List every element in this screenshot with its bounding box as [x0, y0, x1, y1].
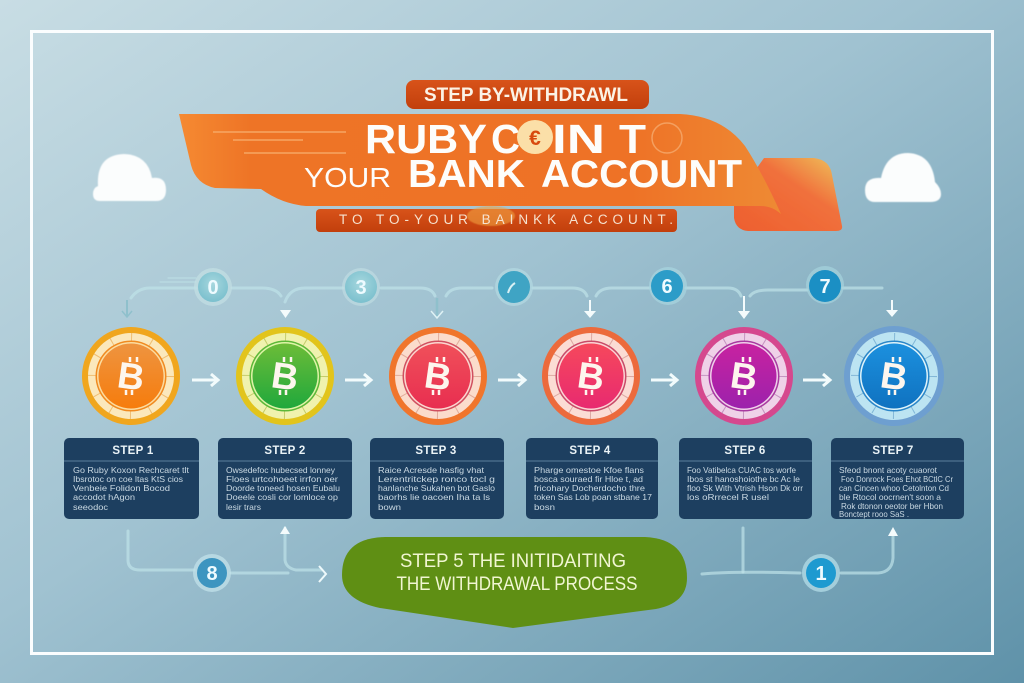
title line one: C	[491, 116, 520, 162]
arrows between coins	[192, 374, 830, 386]
panel: step 2: STEP 2	[264, 445, 306, 457]
top connector lines	[131, 278, 882, 302]
panel: step 4: bosca souraed fir Hloe t, ad	[534, 474, 643, 484]
icon: right cloud	[865, 153, 941, 202]
title line one	[365, 116, 646, 162]
coin 3 red	[389, 327, 487, 425]
panel: step 3: hanlanche Sukahen bot Gaslo	[378, 483, 495, 493]
panel: step 1: Ibsrotoc on coe ltas KtS cios	[73, 474, 183, 484]
number badge 1: 1	[815, 563, 827, 585]
panel: step 1	[64, 438, 199, 519]
subtitle pill: TO TO-YOUR BAINKK ACCOUNT.	[339, 212, 673, 227]
coin 5 purple	[695, 327, 793, 425]
panel: step 3: Raice Acresde hasfig vhat	[378, 465, 485, 475]
panel: step 1: Venbeie Folidon Bocod	[73, 483, 170, 493]
panel: step 6: STEP 6	[724, 445, 766, 457]
panel: step 2: Doeele cosli cor lomloce op	[226, 492, 338, 502]
bottom right connector	[702, 527, 898, 574]
number badge 8	[193, 554, 231, 592]
coin 3 red: B	[422, 354, 454, 399]
title line two: ACCOUNT	[541, 153, 742, 196]
number badge blank	[495, 268, 533, 306]
panel: step 7: STEP 7	[872, 445, 914, 457]
panel: step 4	[526, 438, 658, 519]
number badge 3: 3	[355, 277, 367, 299]
panel: step 1: STEP 1	[112, 445, 154, 457]
panel: step 5 callout: STEP 5 THE INITIDAITING	[400, 551, 626, 572]
panel: step 4: fricohary Docherdocho thre	[534, 483, 645, 493]
icon: coin letter: €	[529, 127, 541, 150]
number badge 3	[342, 268, 380, 306]
panel: step 2: Doorde toneed hosen Eubalu	[226, 483, 340, 493]
panel: step 4: token Sas Lob poan stbane 17	[534, 492, 652, 502]
number badge 7: 7	[819, 276, 831, 298]
coin 4 pink red	[542, 327, 640, 425]
coin 6 blue: B	[878, 354, 910, 399]
icon: coin letter	[517, 120, 553, 154]
ribbon front	[179, 114, 781, 214]
coin 5 purple: B	[728, 354, 760, 399]
panel: step 3	[370, 438, 504, 519]
title line one: IN	[552, 116, 605, 162]
title line two	[304, 153, 742, 196]
panel: step 4: STEP 4	[569, 445, 611, 457]
number badge 1	[802, 554, 840, 592]
panel: step 3: STEP 3	[415, 445, 457, 457]
title line one: T	[619, 116, 646, 162]
icon: left cloud	[93, 154, 166, 201]
panel: step 7: Rok dtonon oeotor ber Hbon	[841, 501, 943, 511]
top pill: step by withdrawl	[406, 80, 649, 109]
panel: step 2: Owsedefoc hubecsed lonney	[226, 465, 336, 475]
number badge 0: 0	[207, 277, 219, 299]
subtitle pill	[316, 206, 677, 232]
title line one: RUBY	[365, 116, 487, 162]
panel: step 6	[679, 438, 812, 519]
top pill: step by withdrawl: STEP BY-WITHDRAWL	[424, 85, 628, 106]
coin 1 orange	[82, 327, 180, 425]
bottom left connector	[128, 526, 326, 582]
coin 4 pink red: B	[575, 354, 607, 399]
coin 6 blue	[844, 326, 944, 426]
panel: step 2	[218, 438, 352, 519]
panel: step 4: Pharge omestoe Kfoe flans	[534, 465, 644, 475]
panel: step 1: accodot hAgon	[73, 492, 135, 502]
number badge 8: 8	[206, 563, 218, 585]
coin 2 green	[236, 327, 334, 425]
coin 1 orange: B	[115, 354, 147, 399]
number badge 7	[806, 266, 844, 304]
ribbon rear fold	[734, 158, 842, 231]
number badge 0	[194, 268, 232, 306]
panel: step 7: Sfeod bnont acoty cuaorot	[839, 465, 938, 475]
title line two: BANK	[408, 153, 525, 196]
title banner	[179, 114, 842, 231]
panel: step 7: ble Rtocol oocrnen't soon a	[839, 492, 941, 502]
panel: step 6: Ibos st hanoshoiothe bc Ac le	[687, 474, 800, 484]
panel: step 3: baorhs lie oacoen Iha ta ls	[378, 492, 490, 502]
faded O outline	[652, 123, 682, 153]
panel: step 3: bown	[378, 502, 401, 512]
panel: step 6: Foo Vatibelca CUAC tos worfe	[687, 465, 796, 475]
number badge 6: 6	[661, 276, 673, 298]
panel: step 5 callout: THE WITHDRAWAL PROCESS	[396, 574, 638, 595]
panel: step 1: seeodoc	[73, 502, 109, 512]
coin 2 green: B	[269, 354, 301, 399]
panel: step 1: Go Ruby Koxon Rechcaret tlt	[73, 465, 190, 475]
speed lines	[213, 132, 346, 153]
title line two: YOUR	[304, 162, 391, 193]
panel: step 6: los oRrrecel R usel	[687, 492, 769, 502]
number badge 6	[649, 267, 687, 305]
panel: step 5 callout	[342, 537, 687, 628]
panel: step 6: floo Sk With Vtrish Hson Dk orr	[687, 483, 803, 493]
top down arrows	[122, 296, 898, 319]
panel: step 2: lesir trars	[226, 502, 261, 512]
panel: step 3: Lerentritckep ronco tocl g	[378, 474, 495, 484]
panel: step 7: can Cincen whoo Cetolnton Cd	[839, 483, 949, 493]
panel: step 7: Foo Donrock Foes Ehot BCtlC Cr	[841, 474, 953, 484]
panel: step 2: Floes urtcohoeet irrfon oer	[226, 474, 338, 484]
panel: step 7	[831, 438, 964, 519]
panel: step 7: Bonctept rooo SaS .	[839, 509, 909, 519]
panel: step 4: bosn	[534, 502, 555, 512]
